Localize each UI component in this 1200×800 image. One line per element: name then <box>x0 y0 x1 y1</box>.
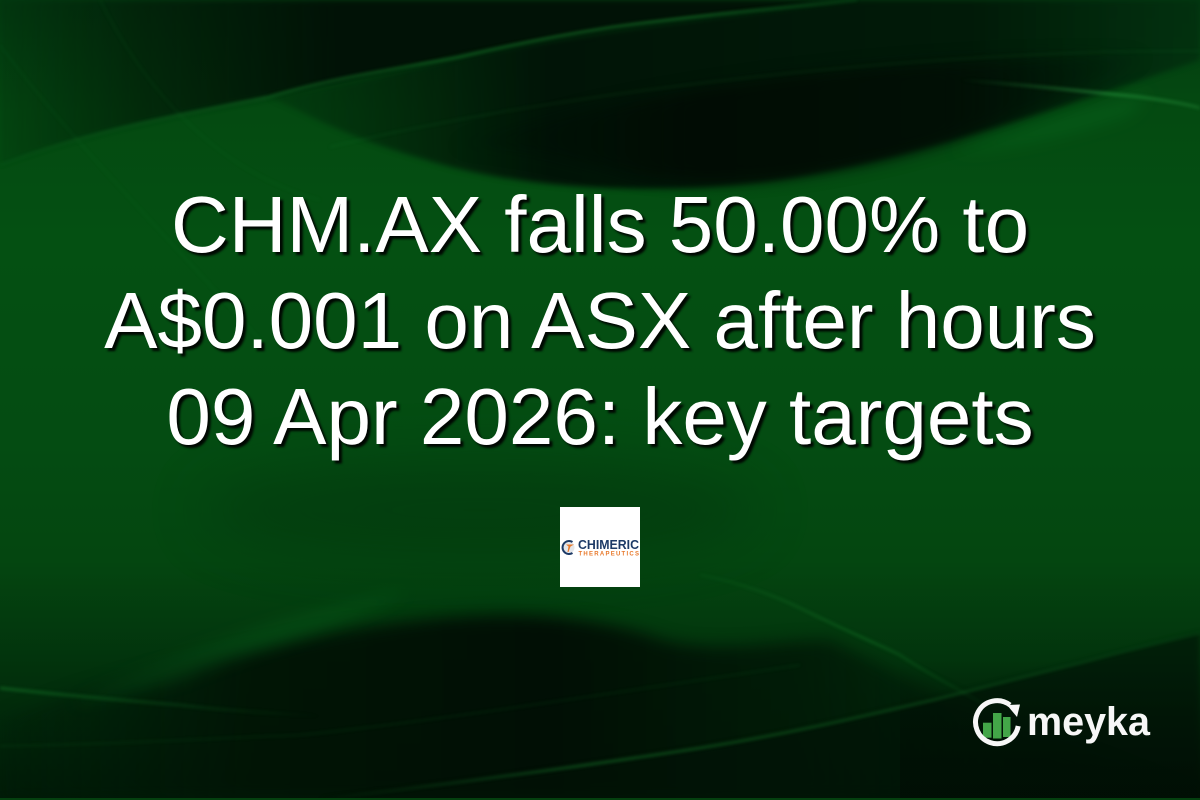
top dark areas <box>0 0 857 165</box>
icon: growth bars in circular arrow <box>976 701 1020 744</box>
brand: meyka logo <box>972 698 1151 746</box>
title <box>104 180 1097 464</box>
soft bright band at upper right <box>950 92 1150 152</box>
title: A$0.001 on ASX after hours <box>104 276 1096 365</box>
wordmark: meyka <box>1027 700 1151 744</box>
company logo: Chimeric Therapeutics: CHIMERIC <box>578 538 639 552</box>
title: CHM.AX falls 50.00% to <box>171 180 1029 269</box>
lower dark mound <box>0 615 1200 800</box>
soft green band rising from the lower left <box>70 590 410 705</box>
title: 09 Apr 2026: key targets <box>166 372 1034 461</box>
company logo: Chimeric Therapeutics <box>560 507 640 587</box>
floor below bright curve <box>320 633 1200 800</box>
company logo: Chimeric Therapeutics: THERAPEUTICS <box>578 552 639 558</box>
slightly darker patch below the title <box>200 460 760 560</box>
